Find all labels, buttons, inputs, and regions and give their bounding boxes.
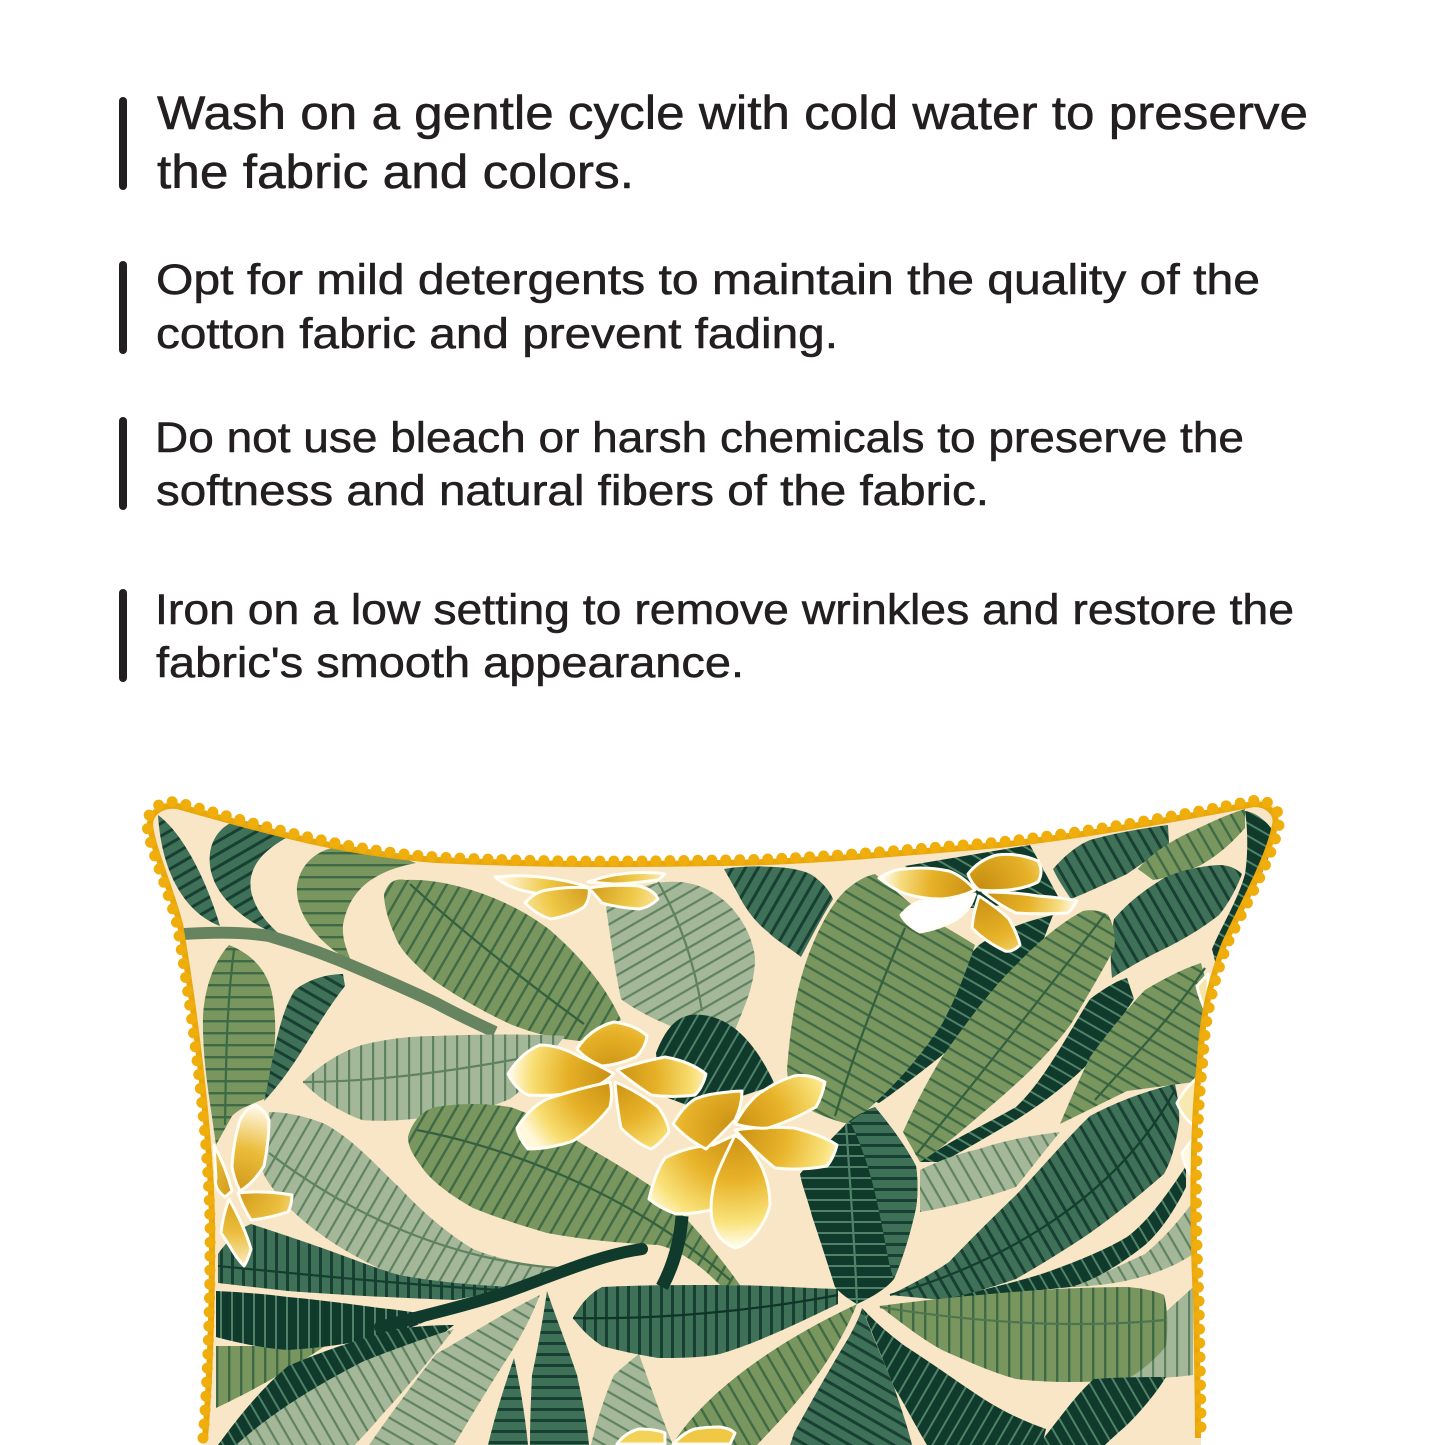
flower: right edge <box>1177 974 1208 1174</box>
care instruction: wash: Wash on a gentle cycle with cold water to preserve <box>157 86 1308 139</box>
flower: bottom edge <box>617 1427 735 1444</box>
care instruction: detergent <box>119 256 1260 358</box>
leaves: lower right cluster <box>879 1084 1195 1445</box>
care instruction: wash <box>119 86 1308 198</box>
care instruction: bleach: softness and natural fibers of the fabric. <box>156 467 989 515</box>
care instruction: wash: the fabric and colors. <box>157 145 634 198</box>
care instruction: detergent: Opt for mild detergents to maintain the quality of the <box>156 256 1260 304</box>
stems <box>380 1216 682 1327</box>
flower: top right <box>879 854 1077 951</box>
leaves: upper left cluster <box>158 815 495 1145</box>
care instruction: bleach: Do not use bleach or harsh chemicals to preserve the <box>155 414 1244 462</box>
care instruction: detergent: cotton fabric and prevent fading. <box>156 310 838 358</box>
care instruction: iron: fabric's smooth appearance. <box>156 639 744 687</box>
flower: centre <box>649 1075 837 1248</box>
leaves: lower left cluster <box>216 1034 740 1445</box>
care instruction: bleach <box>119 414 1244 515</box>
care instruction: iron <box>119 586 1294 687</box>
flower: top centre <box>495 872 665 919</box>
flower: left edge <box>214 1105 292 1266</box>
pillow photo <box>140 795 1290 1445</box>
flower: centre left <box>508 1022 706 1149</box>
pillow fabric with leaf print <box>140 795 1290 1445</box>
care instruction: iron: Iron on a low setting to remove wrinkles and restore the <box>155 586 1294 634</box>
pom-pom trim <box>147 800 1280 1438</box>
leaves: upper right cluster <box>787 809 1271 1162</box>
leaves: top centre <box>384 866 833 1110</box>
leaves: central rosette <box>573 1107 1046 1445</box>
